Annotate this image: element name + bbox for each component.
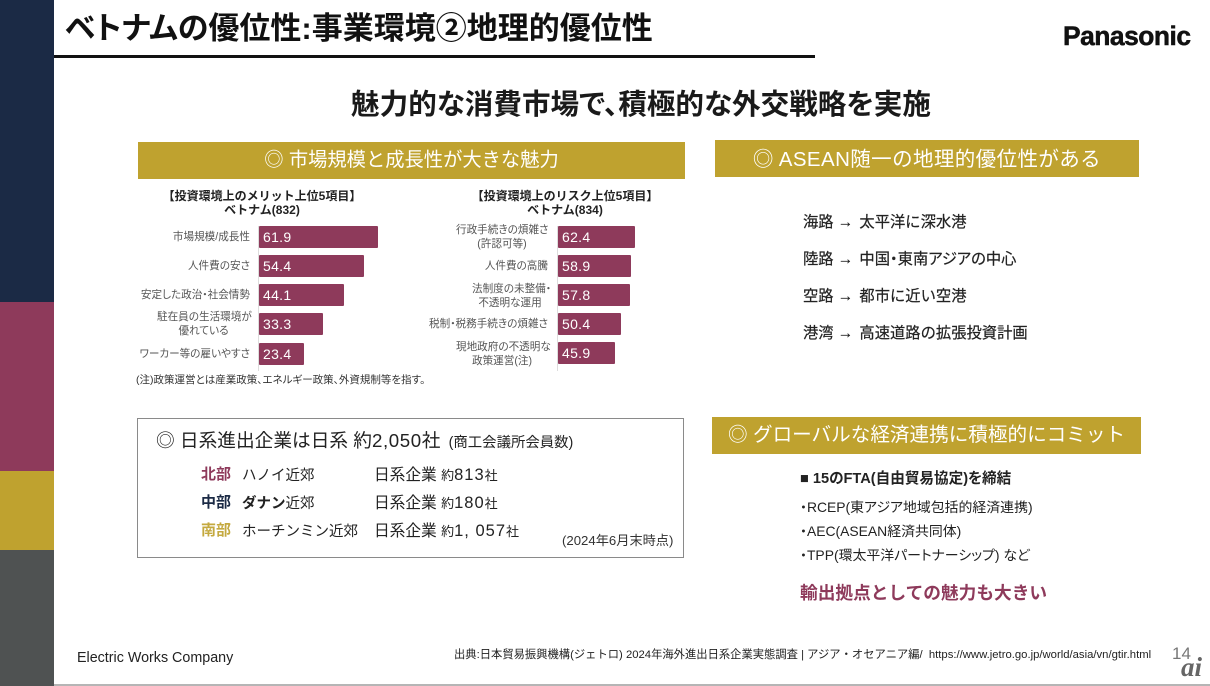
panel heading: ◎ 日系進出企業は日系 約2,050社 (商工会議所会員数) bbox=[156, 430, 573, 451]
bottom line bbox=[54, 684, 1210, 686]
bar: risk 2: 58.9 bbox=[562, 258, 590, 274]
bar: risk 3: 法制度の未整備・ bbox=[472, 283, 551, 295]
row: north: 北部 bbox=[201, 466, 231, 483]
bar: merit 2: 54.4 bbox=[263, 258, 291, 274]
row: central: ダナン近郊 bbox=[242, 496, 314, 512]
text block: FTA: ・RCEP(東アジア地域包括的経済連携) bbox=[800, 499, 1033, 515]
bar: merit 4: 駐在員の生活環境が bbox=[157, 311, 252, 323]
bar: risk 4: 50.4 bbox=[562, 316, 590, 332]
bar: risk 5 bbox=[456, 340, 615, 366]
main heading: 魅力的な消費市場で、積極的な外交戦略を実施 bbox=[351, 89, 931, 121]
bar: risk 4: 税制・税務手続きの煩雑さ bbox=[429, 318, 548, 330]
bar: risk 1: 行政手続きの煩雑さ bbox=[456, 224, 548, 236]
bar: risk 3: 不透明な運用 bbox=[478, 296, 542, 308]
row: north: ハノイ近郊 bbox=[242, 468, 314, 484]
callout: 輸出拠点としての魅力も大きい bbox=[800, 583, 1047, 603]
row: central: 中部 bbox=[201, 494, 231, 511]
chart heading: risks: 【投資環境上のリスク上位5項目】 bbox=[472, 189, 658, 203]
text block: FTA: ・AEC(ASEAN経済共同体) bbox=[800, 523, 961, 539]
text block: FTA bbox=[800, 470, 1033, 563]
chart: investment merits bbox=[140, 189, 378, 371]
as-of note: (2024年6月末時点) bbox=[562, 533, 673, 548]
bar: merit 4: 優れている bbox=[178, 324, 229, 336]
bar: merit 4 bbox=[157, 310, 323, 336]
row: south bbox=[201, 522, 519, 540]
bar: risk 2 bbox=[485, 255, 631, 277]
chart heading: merits bbox=[163, 189, 361, 217]
chart heading: merits: ベトナム(832) bbox=[224, 203, 300, 217]
row: south: 南部 bbox=[201, 522, 231, 539]
bar: risk 1 bbox=[456, 224, 635, 250]
bar: risk 5: 現地政府の不透明な bbox=[456, 341, 551, 353]
bar: risk 1: 62.4 bbox=[562, 229, 590, 245]
panel: Japanese companies bbox=[137, 418, 684, 558]
bar: merit 1 bbox=[173, 226, 378, 248]
bar: merit 3: 44.1 bbox=[263, 287, 291, 303]
panel: market size header: ◎ 市場規模と成長性が大きな魅力 bbox=[264, 150, 559, 171]
bar: risk 5: 45.9 bbox=[562, 345, 590, 361]
bar: merit 5 bbox=[140, 343, 304, 365]
row: central bbox=[201, 494, 498, 512]
bar: merit 4: 33.3 bbox=[263, 316, 291, 332]
row: south: ホーチンミン近郊 bbox=[242, 524, 358, 540]
chart heading: risks: ベトナム(834) bbox=[527, 203, 603, 217]
panel: geographic header: ◎ ASEAN随一の地理的優位性がある bbox=[753, 148, 1101, 171]
watermark: ai: ai bbox=[1181, 652, 1202, 682]
chart footnote: (注)政策運営とは産業政策、エネルギー政策、外資規制等を指す。 bbox=[136, 374, 425, 386]
list: geographic advantages: 港湾 → 高速道路の拡張投資計画 bbox=[803, 325, 1028, 342]
panel: geographic header bbox=[715, 140, 1139, 177]
list: geographic advantages: 空路 → 都市に近い空港 bbox=[803, 288, 966, 305]
bar: merit 2 bbox=[188, 255, 364, 277]
text block: FTA: ■ 15のFTA(自由貿易協定)を締結 bbox=[800, 471, 1011, 487]
bar: merit 5: 23.4 bbox=[263, 346, 291, 362]
row: north: 日系企業 約813社 bbox=[374, 466, 498, 484]
bar: risk 5: 政策運営(注) bbox=[472, 354, 532, 366]
panel: market size header bbox=[138, 142, 685, 179]
bar: merit 2: 人件費の安さ bbox=[188, 260, 250, 272]
chart: investment risks bbox=[429, 189, 658, 371]
source: 出典:日本貿易振興機構(ジェトロ) 2024年海外進出日系企業実態調査 | アジア・オセアニア編/ https://www.jetro.go.jp/world/asia/vn/gtir.html bbox=[454, 649, 1151, 661]
sidebar color bands bbox=[0, 0, 54, 686]
bar: merit 3: 安定した政治・社会情勢 bbox=[141, 289, 250, 301]
chart heading: merits: 【投資環境上のメリット上位5項目】 bbox=[163, 189, 361, 203]
logo: Panasonic: Panasonic bbox=[1063, 21, 1191, 51]
panel: economic partnership header: ◎ グローバルな経済連携に積極的にコミット bbox=[728, 424, 1125, 446]
page number: 14 bbox=[1172, 644, 1191, 663]
row: central: 日系企業 約180社 bbox=[374, 494, 498, 512]
row: north bbox=[201, 466, 498, 484]
bar: risk 3: 57.8 bbox=[562, 287, 590, 303]
bar: risk 2: 人件費の高騰 bbox=[485, 260, 548, 272]
footer company name: Electric Works Company bbox=[77, 650, 233, 666]
bar: merit 5: ワーカー等の雇いやすさ bbox=[140, 348, 250, 360]
bar: risk 3 bbox=[472, 282, 630, 308]
row: south: 日系企業 約1, 057社 bbox=[374, 522, 519, 540]
chart heading: risks bbox=[472, 189, 658, 217]
bar: risk 4 bbox=[429, 313, 621, 335]
list: geographic advantages: 海路 → 太平洋に深水港 bbox=[803, 214, 966, 231]
panel: economic partnership header bbox=[712, 417, 1141, 454]
list: geographic advantages bbox=[803, 214, 1028, 342]
title: ベトナムの優位性:事業環境②地理的優位性 bbox=[65, 11, 653, 46]
list: geographic advantages: 陸路 → 中国・東南アジアの中心 bbox=[803, 251, 1016, 268]
text block: FTA: ・TPP(環太平洋パートナーシップ) など bbox=[800, 547, 1030, 563]
bar: merit 1: 61.9 bbox=[263, 229, 291, 245]
bar: risk 1: (許認可等) bbox=[477, 238, 527, 250]
bar: merit 1: 市場規模/成長性 bbox=[173, 231, 250, 243]
bar: merit 3 bbox=[141, 284, 344, 306]
